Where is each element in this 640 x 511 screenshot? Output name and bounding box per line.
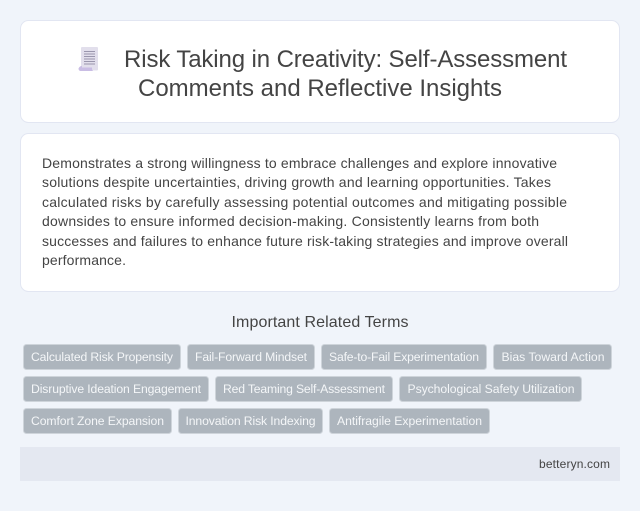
tag: Fail-Forward Mindset: [195, 350, 308, 364]
tag group: related terms: [24, 344, 612, 434]
footer text: betteryn.com: [539, 457, 610, 471]
tag: Innovation Risk Indexing: [186, 414, 316, 428]
tag: [322, 344, 486, 370]
tag: [330, 408, 490, 434]
tag: Comfort Zone Expansion: [31, 414, 164, 428]
tag: Red Teaming Self-Assessment: [223, 382, 386, 396]
tag: [178, 408, 322, 434]
panel: description: [20, 134, 620, 292]
tag: [400, 376, 582, 402]
tag: [24, 344, 180, 370]
tag: [188, 344, 314, 370]
text block: description: calculated risks by carefully assessing potential outcomes and mitigating possible: [42, 194, 567, 210]
tag: [494, 344, 612, 370]
tag: [216, 376, 392, 402]
title: Comments and Reflective Insights: [138, 75, 502, 102]
tag: Safe-to-Fail Experimentation: [329, 350, 479, 364]
footer bar: [20, 447, 620, 481]
title: [124, 46, 567, 102]
title: Risk Taking in Creativity: Self-Assessment: [124, 46, 567, 73]
text block: description: downsides to ensure informed decision-making. Consistently learns from both: [42, 213, 539, 229]
text block: description: Demonstrates a strong willingness to embrace challenges and explore innovative: [42, 155, 557, 171]
text block: description: solutions despite uncertainties, driving growth and learning opportunities. Takes: [42, 174, 551, 190]
text block: description: successes and failures to enhance future risk-taking strategies and improve overall: [42, 233, 568, 249]
tag: Calculated Risk Propensity: [31, 350, 174, 364]
tag: Bias Toward Action: [502, 350, 604, 364]
icon: document scroll: [78, 47, 98, 71]
text block: description: performance.: [42, 252, 126, 268]
tag: [24, 408, 172, 434]
tag: [24, 376, 208, 402]
tag: Disruptive Ideation Engagement: [31, 382, 202, 396]
tag: Antifragile Experimentation: [337, 414, 482, 428]
heading: related terms: Important Related Terms: [232, 314, 408, 331]
tag: Psychological Safety Utilization: [408, 382, 574, 396]
text block: description: [42, 155, 568, 268]
panel: title card: [20, 20, 620, 122]
